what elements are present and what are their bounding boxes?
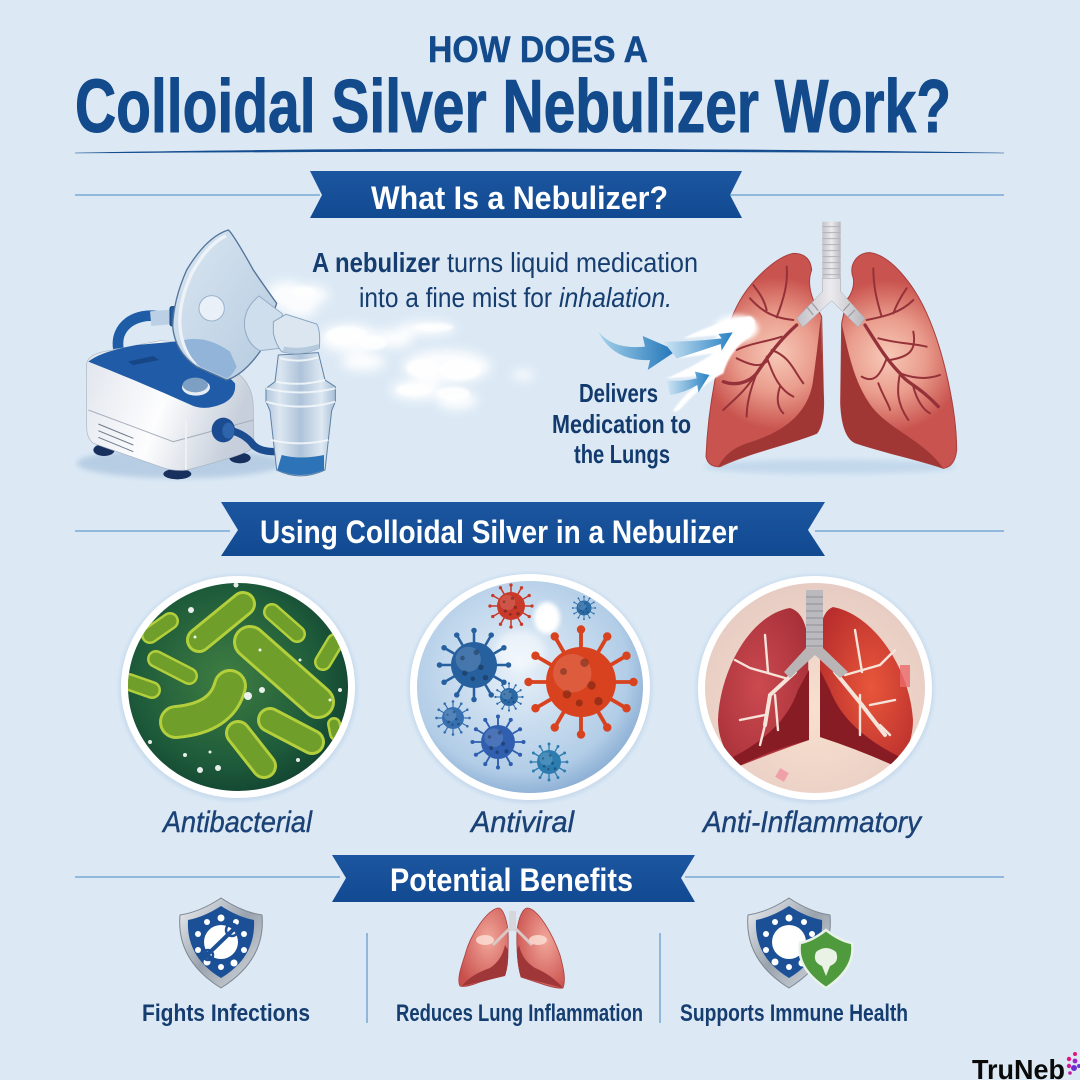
delivers medication label: Delivers bbox=[579, 378, 658, 408]
circle: antibacterial bacteria bbox=[119, 575, 357, 801]
circle: antiviral viruses bbox=[408, 573, 652, 803]
banner: using colloidal silver bbox=[221, 502, 825, 556]
delivers medication label: Medication to bbox=[552, 409, 691, 439]
nebulizer machine illustration bbox=[77, 230, 533, 479]
machine top panel bbox=[88, 340, 235, 408]
mist hitting lungs bbox=[667, 315, 758, 412]
title underline swoosh bbox=[75, 149, 1004, 153]
airflow arrows bbox=[598, 332, 733, 395]
label: fights infections: Fights Infections bbox=[142, 1000, 310, 1027]
machine button bbox=[182, 378, 210, 396]
description text: inhalation. bbox=[559, 282, 672, 313]
title line: how does a: HOW DOES A bbox=[428, 29, 648, 70]
description text: into a fine mist for bbox=[359, 282, 552, 313]
banner: using colloidal silver: Using Colloidal Silver in a Nebulizer bbox=[260, 514, 738, 550]
medication cup bbox=[266, 353, 335, 476]
delivers medication label bbox=[552, 378, 691, 469]
banner: what is a nebulizer: What Is a Nebulizer? bbox=[371, 180, 668, 216]
banner: what is a nebulizer bbox=[310, 171, 742, 218]
icon: shield fights infections bbox=[180, 898, 262, 988]
label: anti-inflammatory: Anti-Inflammatory bbox=[701, 806, 923, 839]
title bbox=[75, 29, 951, 148]
mist cloud bbox=[267, 281, 533, 409]
machine body bbox=[87, 341, 254, 470]
icon: shield with green immune shield bbox=[748, 898, 852, 988]
circle: anti-inflammatory lungs bbox=[696, 575, 934, 803]
label: supports immune health: Supports Immune Health bbox=[680, 1000, 908, 1027]
delivers medication label: the Lungs bbox=[574, 439, 670, 469]
divider bbox=[659, 933, 661, 1023]
description text: turns liquid medication bbox=[447, 247, 698, 278]
face mask bbox=[173, 230, 277, 380]
mask strap bbox=[118, 307, 188, 348]
mask funnel and elbow connector bbox=[244, 296, 320, 354]
air hose bbox=[212, 418, 275, 452]
label: reduces lung inflammation: Reduces Lung Inflammation bbox=[396, 1000, 643, 1027]
lungs illustration bbox=[598, 222, 957, 474]
divider bbox=[366, 933, 368, 1023]
banner: potential benefits bbox=[332, 855, 695, 902]
machine feet bbox=[93, 444, 251, 479]
banner: potential benefits: Potential Benefits bbox=[390, 862, 633, 898]
description text: A nebulizer bbox=[312, 247, 440, 278]
label: antiviral: Antiviral bbox=[469, 806, 575, 839]
icon: small lungs bbox=[459, 908, 564, 988]
description text bbox=[312, 247, 698, 313]
label: antibacterial: Antibacterial bbox=[161, 806, 313, 839]
machine vents bbox=[98, 424, 133, 452]
machine shadow bbox=[77, 448, 283, 478]
